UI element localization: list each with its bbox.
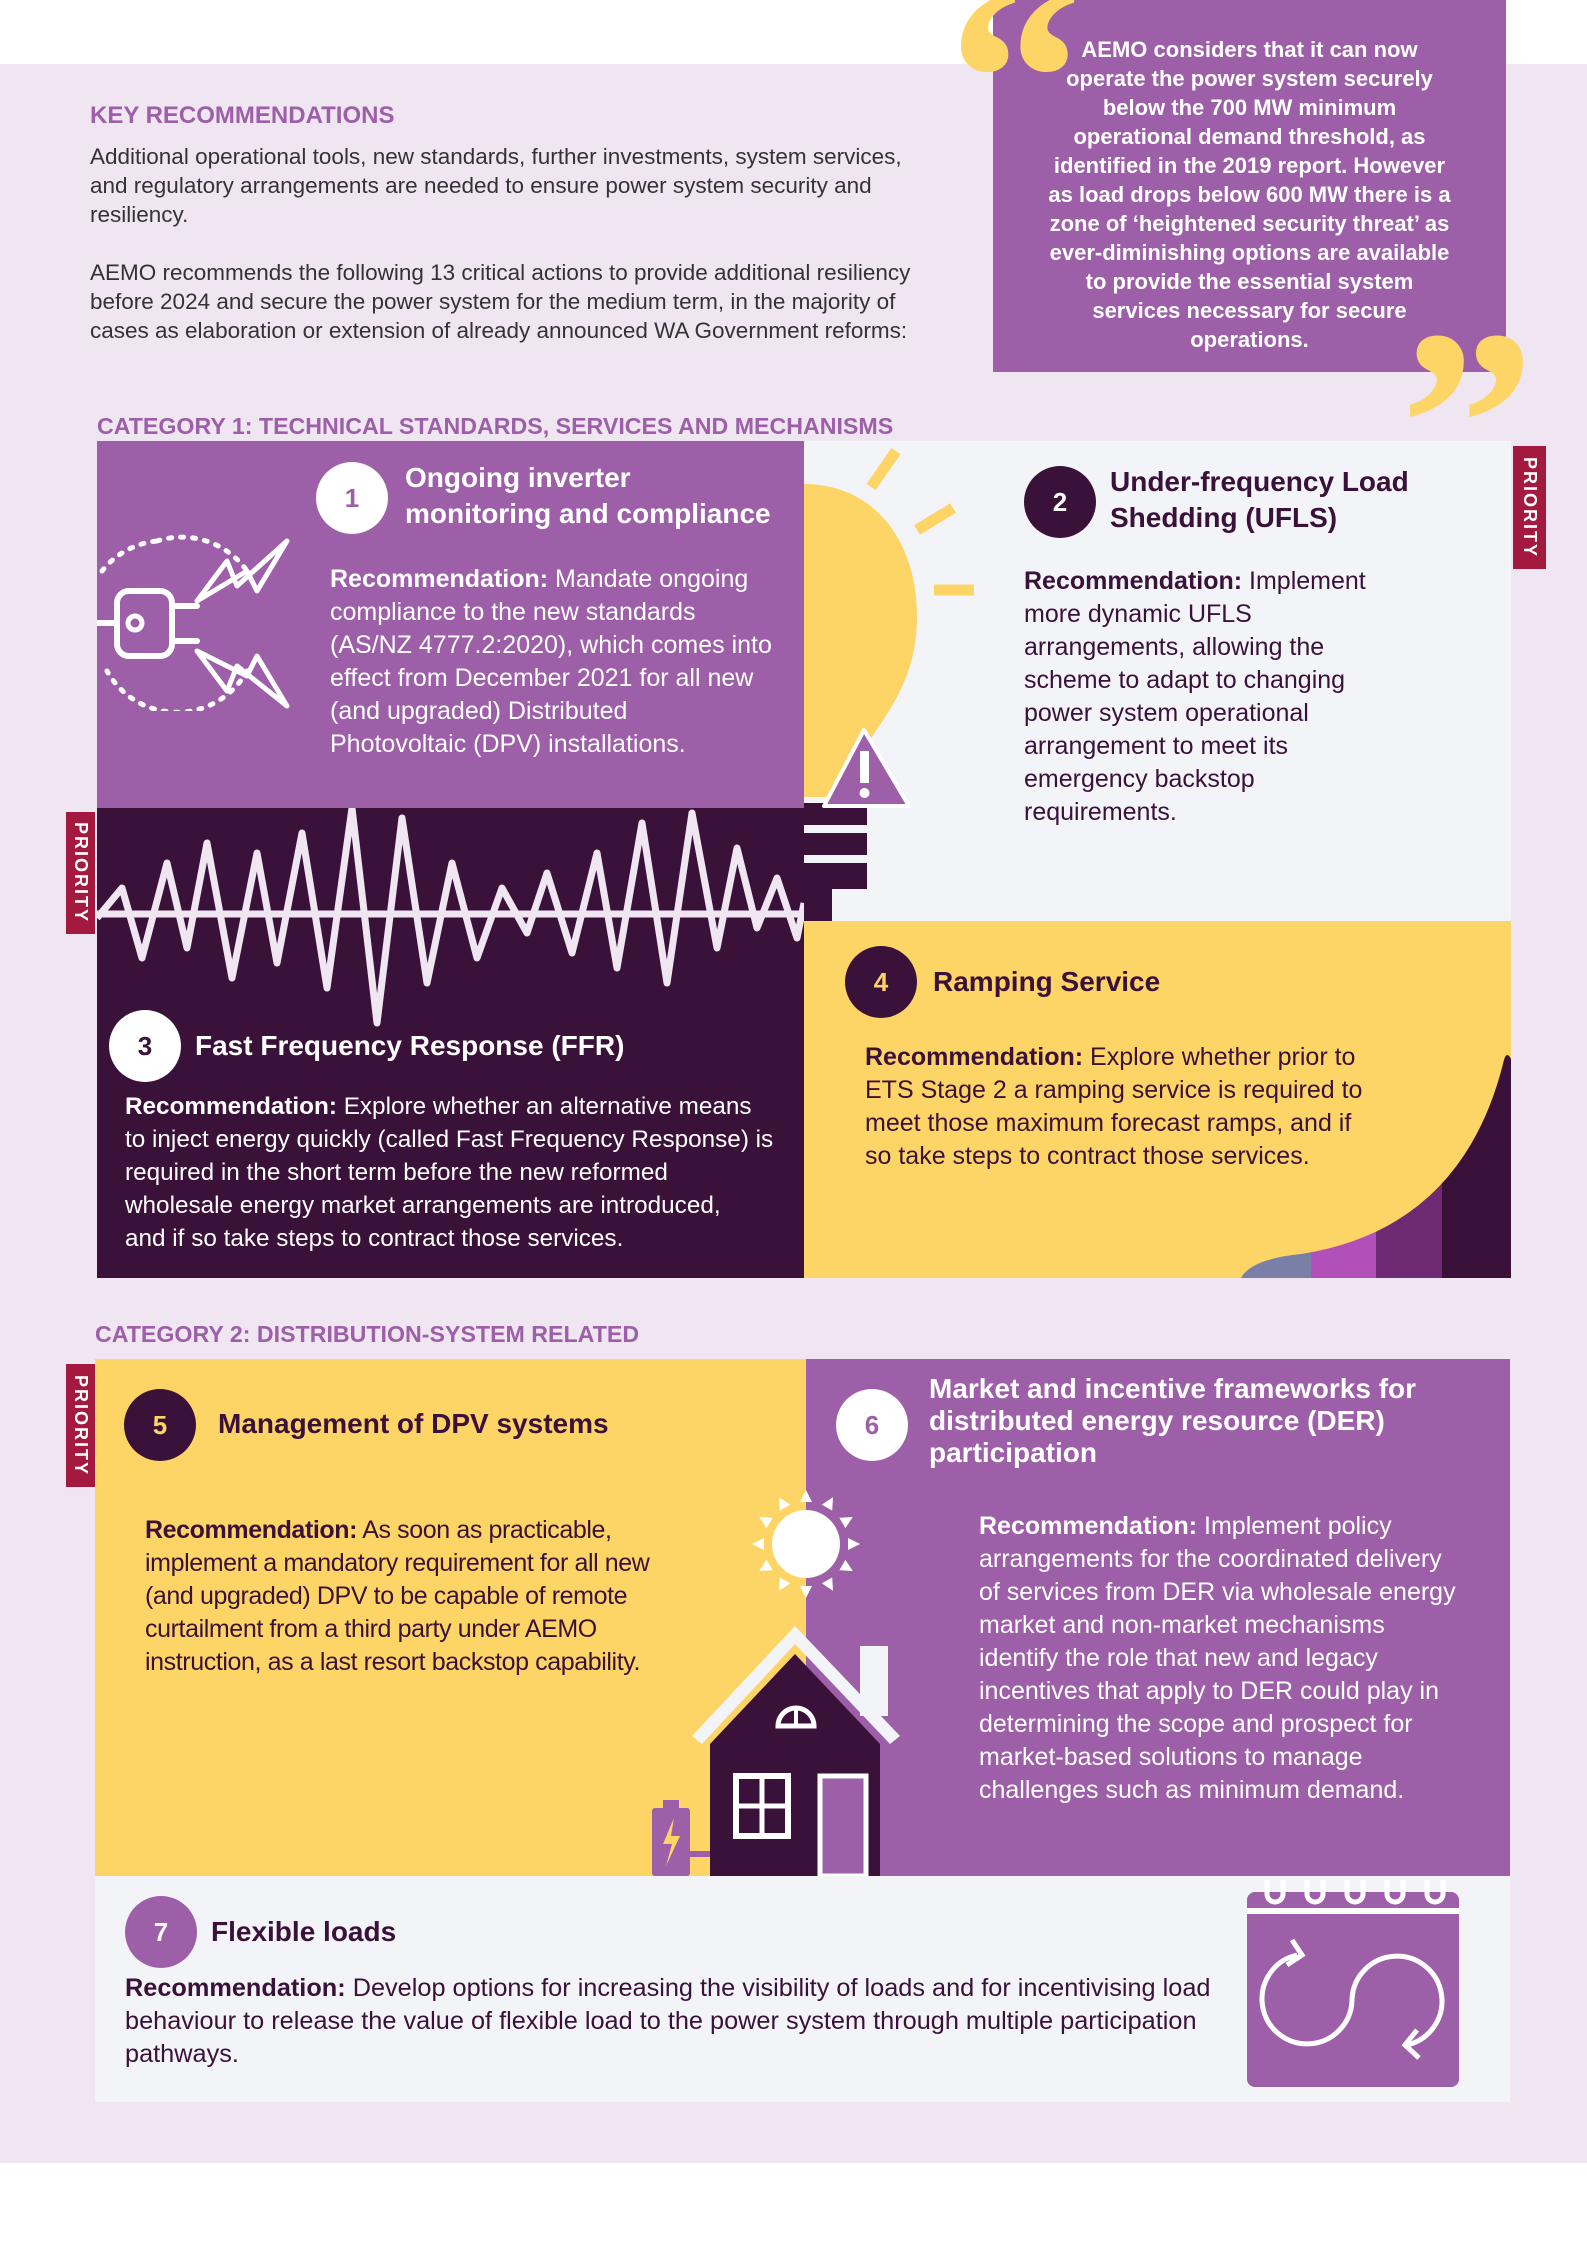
priority tag left 1 bbox=[66, 812, 95, 934]
quote box: operate the power system securely bbox=[1066, 66, 1433, 91]
title 7: Flexible loads bbox=[211, 1916, 396, 1947]
quote box: below the 700 MW minimum bbox=[1103, 95, 1396, 120]
body 4: Recommendation: Explore whether prior to bbox=[865, 1043, 1355, 1071]
title 6: participation bbox=[929, 1437, 1097, 1468]
body 2: emergency backstop bbox=[1024, 765, 1255, 793]
body 1: effect from December 2021 for all new bbox=[330, 664, 753, 692]
number badge 7: 7 bbox=[154, 1916, 168, 1946]
body 3: to inject energy quickly (called Fast Frequency Response) is bbox=[125, 1126, 773, 1153]
intro text: resiliency. bbox=[90, 202, 188, 227]
priority tag left 2 bbox=[66, 1364, 95, 1487]
icon: calendar cycle bbox=[1247, 1880, 1459, 2087]
panel 1: inverter monitoring bbox=[97, 441, 804, 808]
priority tag left 1: PRIORITY bbox=[71, 822, 91, 924]
body 6: arrangements for the coordinated delivery bbox=[979, 1545, 1442, 1573]
body 5: (and upgraded) DPV to be capable of remote bbox=[145, 1582, 627, 1610]
body 6: market and non-market mechanisms bbox=[979, 1611, 1385, 1639]
body 1 bbox=[330, 565, 772, 758]
body 5 bbox=[145, 1516, 650, 1676]
body 2: power system operational bbox=[1024, 699, 1309, 727]
body 1: Photovoltaic (DPV) installations. bbox=[330, 730, 686, 758]
body 1: Recommendation: Mandate ongoing bbox=[330, 565, 748, 593]
quote box: operations. bbox=[1190, 327, 1309, 352]
body 2: requirements. bbox=[1024, 798, 1177, 826]
panel 5: DPV management bbox=[95, 1359, 806, 1876]
heading: category 1: CATEGORY 1: TECHNICAL STANDARDS, SERVICES AND MECHANISMS bbox=[97, 413, 893, 439]
number badge 3: 3 bbox=[138, 1030, 152, 1060]
body 2: Recommendation: Implement bbox=[1024, 567, 1366, 595]
body 6: market-based solutions to manage bbox=[979, 1743, 1363, 1771]
body 2: arrangements, allowing the bbox=[1024, 633, 1324, 661]
icon: plug bbox=[97, 534, 290, 711]
body 3: and if so take steps to contract those services. bbox=[125, 1225, 623, 1252]
number badge 6: 6 bbox=[865, 1410, 879, 1440]
quote box: zone of ‘heightened security threat’ as bbox=[1050, 211, 1449, 236]
body 5: implement a mandatory requirement for all new bbox=[145, 1549, 649, 1577]
icon: close quote: ” bbox=[1400, 275, 1535, 574]
body 2: more dynamic UFLS bbox=[1024, 600, 1252, 628]
body 7: pathways. bbox=[125, 2040, 239, 2068]
body 3 bbox=[125, 1093, 773, 1252]
panel 4: ramping bbox=[804, 921, 1511, 1278]
title 1: Ongoing inverter bbox=[405, 462, 631, 493]
quote box: ever-diminishing options are available bbox=[1050, 240, 1449, 265]
number badge 1 bbox=[316, 462, 388, 534]
body 1: compliance to the new standards bbox=[330, 598, 696, 626]
title 1: monitoring and compliance bbox=[405, 498, 771, 529]
icon: house with battery bbox=[652, 1626, 900, 1876]
number badge 5: 5 bbox=[153, 1410, 167, 1440]
number badge 4 bbox=[845, 946, 917, 1018]
number badge 1: 1 bbox=[345, 482, 359, 512]
number badge 6 bbox=[836, 1389, 908, 1461]
title 2 bbox=[1110, 466, 1409, 533]
number badge 4: 4 bbox=[874, 966, 888, 996]
panel 3: FFR bbox=[97, 808, 804, 1278]
quote box: services necessary for secure bbox=[1092, 298, 1407, 323]
panel 2: UFLS bbox=[804, 441, 1511, 921]
body 3: wholesale energy market arrangements are introduced, bbox=[125, 1192, 721, 1219]
body 6: identify the role that new and legacy bbox=[979, 1644, 1378, 1672]
body 6: Recommendation: Implement policy bbox=[979, 1512, 1392, 1540]
title 6: distributed energy resource (DER) bbox=[929, 1405, 1385, 1436]
number badge 7 bbox=[125, 1896, 197, 1968]
quote box: identified in the 2019 report. However bbox=[1054, 153, 1445, 178]
body 5: instruction, as a last resort backstop capability. bbox=[145, 1648, 640, 1676]
intro text: cases as elaboration or extension of already announced WA Government reforms: bbox=[90, 318, 907, 343]
intro text: AEMO recommends the following 13 critical actions to provide additional resiliency bbox=[90, 260, 910, 285]
intro text: Additional operational tools, new standards, further investments, system services, bbox=[90, 144, 902, 169]
number badge 2 bbox=[1024, 466, 1096, 538]
title 3: Fast Frequency Response (FFR) bbox=[195, 1030, 624, 1061]
panel 7: flexible loads bbox=[95, 1876, 1510, 2102]
intro text: before 2024 and secure the power system for the medium term, in the majority of bbox=[90, 289, 895, 314]
body 2 bbox=[1024, 567, 1366, 826]
body 6: of services from DER via wholesale energy bbox=[979, 1578, 1456, 1606]
body 6: determining the scope and prospect for bbox=[979, 1710, 1413, 1738]
body 5: curtailment from a third party under AEMO bbox=[145, 1615, 597, 1643]
body 5: Recommendation: As soon as practicable, bbox=[145, 1516, 612, 1544]
body 3: required in the short term before the new reformed bbox=[125, 1159, 668, 1186]
body 6: incentives that apply to DER could play in bbox=[979, 1677, 1439, 1705]
priority tag right: PRIORITY bbox=[1520, 457, 1540, 558]
quote box: as load drops below 600 MW there is a bbox=[1048, 182, 1451, 207]
quote box: to provide the essential system bbox=[1086, 269, 1413, 294]
quote box: operational demand threshold, as bbox=[1073, 124, 1426, 149]
body 3: Recommendation: Explore whether an alternative means bbox=[125, 1093, 752, 1120]
number badge 5 bbox=[124, 1389, 196, 1461]
body 4: meet those maximum forecast ramps, and if bbox=[865, 1109, 1351, 1137]
body 1: (and upgraded) Distributed bbox=[330, 697, 627, 725]
body 7: behaviour to release the value of flexible load to the power system through multiple participation bbox=[125, 2007, 1197, 2035]
body 1: (AS/NZ 4777.2:2020), which comes into bbox=[330, 631, 772, 659]
body 2: scheme to adapt to changing bbox=[1024, 666, 1345, 694]
title 6 bbox=[929, 1373, 1416, 1468]
quote box: AEMO considers that it can now bbox=[1081, 37, 1418, 62]
title 2: Under-frequency Load bbox=[1110, 466, 1409, 497]
body 6 bbox=[979, 1512, 1456, 1804]
intro text bbox=[90, 144, 910, 343]
title 2: Shedding (UFLS) bbox=[1110, 502, 1337, 533]
number badge 2: 2 bbox=[1053, 486, 1067, 516]
priority tag left 2: PRIORITY bbox=[71, 1375, 91, 1476]
body 7 bbox=[125, 1974, 1210, 2068]
body 4 bbox=[865, 1043, 1362, 1170]
body 6: challenges such as minimum demand. bbox=[979, 1776, 1404, 1804]
icon: sun bbox=[752, 1490, 860, 1598]
priority tag right bbox=[1513, 446, 1546, 569]
panel 6: DER participation bbox=[806, 1359, 1510, 1876]
icon: waveform bbox=[97, 808, 804, 1026]
icon: lightbulb bbox=[804, 448, 974, 921]
body 4: ETS Stage 2 a ramping service is required to bbox=[865, 1076, 1362, 1104]
body 4: so take steps to contract those services. bbox=[865, 1142, 1310, 1170]
icon: ramp bars bbox=[1241, 1055, 1511, 1278]
heading: category 2: CATEGORY 2: DISTRIBUTION-SYSTEM RELATED bbox=[95, 1321, 639, 1347]
number badge 3 bbox=[109, 1010, 181, 1082]
title 4: Ramping Service bbox=[933, 966, 1160, 997]
quote box bbox=[993, 0, 1506, 372]
title 6: Market and incentive frameworks for bbox=[929, 1373, 1416, 1404]
intro text: and regulatory arrangements are needed to ensure power system security and bbox=[90, 173, 872, 198]
heading: key recommendations: KEY RECOMMENDATIONS bbox=[90, 102, 394, 129]
title 5: Management of DPV systems bbox=[218, 1408, 609, 1439]
title 1 bbox=[405, 462, 771, 529]
body 7: Recommendation: Develop options for increasing the visibility of loads and for incentivising load bbox=[125, 1974, 1210, 2002]
body 2: arrangement to meet its bbox=[1024, 732, 1288, 760]
